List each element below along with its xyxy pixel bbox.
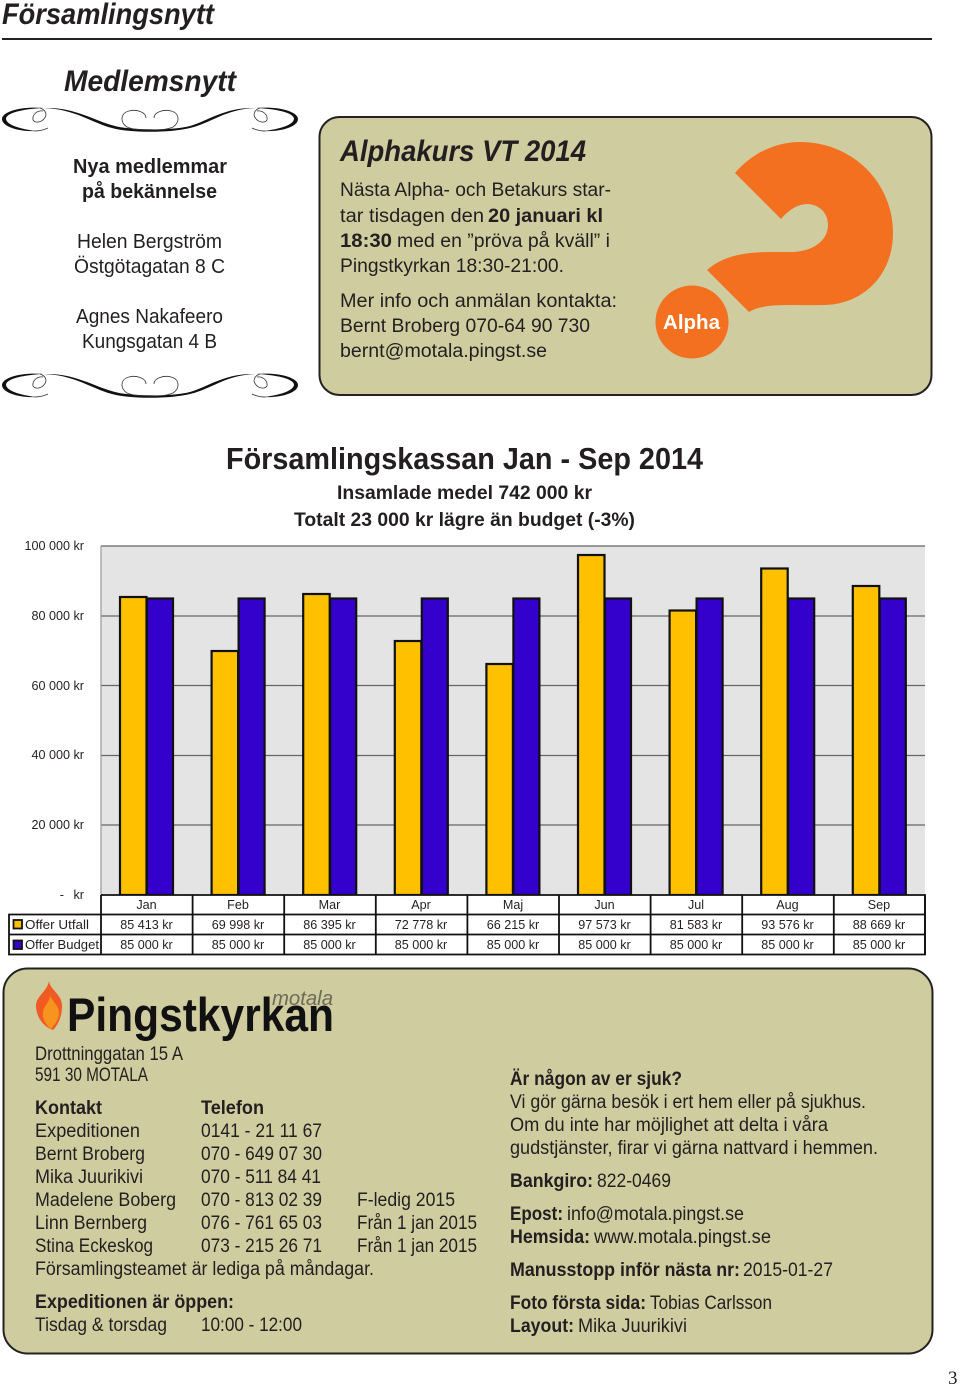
text block: contact list: Från 1 jan 2015 — [357, 1236, 477, 1257]
table: Offer Utfall values: 72 778 kr — [395, 918, 447, 932]
text block: contact list: F-ledig 2015 — [357, 1190, 455, 1211]
heading: chart title: Insamlade medel 742 000 kr — [337, 483, 593, 504]
text block: opening hours — [35, 1292, 302, 1336]
text block: course details: Nästa Alpha- och Betakurs star- — [340, 180, 611, 201]
table: Offer Budget values: 85 000 kr — [487, 938, 539, 952]
axis labels: 20 000 kr — [31, 818, 84, 832]
text block: address: 591 30 MOTALA — [35, 1065, 148, 1086]
text block: practical details: info@motala.pingst.se — [567, 1204, 744, 1225]
text block: contact list: 070 - 649 07 30 — [201, 1144, 322, 1165]
table: months: Apr — [411, 898, 431, 912]
text block: course details: Pingstkyrkan 18:30-21:00. — [340, 256, 564, 277]
text block: contact list: Stina Eckeskog — [35, 1236, 153, 1257]
text block: practical details: 822-0469 — [597, 1171, 671, 1192]
text block: contact list: 073 - 215 26 71 — [201, 1236, 322, 1257]
panel: contact information — [4, 968, 932, 1354]
table: Offer Utfall values: 97 573 kr — [578, 918, 631, 932]
table: Offer Budget values — [120, 938, 905, 952]
axis labels: - — [60, 888, 64, 902]
table: months: Mar — [319, 898, 340, 912]
table: Offer Budget values: 85 000 kr — [303, 938, 356, 952]
text block: course details: med en ”pröva på kväll” i — [397, 231, 610, 252]
table: months: Aug — [776, 898, 799, 912]
logo: Pingstkyrkan motala: Pingstkyrkan — [67, 988, 334, 1041]
legend: Offer Budget: Offer Budget — [25, 937, 99, 952]
table: Offer Utfall values: 85 413 kr — [120, 918, 173, 932]
table: Offer Utfall values — [120, 918, 905, 932]
text block: contact list: Mika Juurikivi — [35, 1167, 143, 1188]
heading: chart title: Totalt 23 000 kr lägre än budget (-3%) — [294, 510, 635, 531]
icon: Alpha question mark: Alpha — [663, 312, 721, 334]
text block: contact list: Telefon — [201, 1098, 264, 1119]
bars: Offer Budget — [147, 598, 906, 895]
text block: practical details: Hemsida: — [510, 1227, 590, 1248]
text block: contact list: Madelene Boberg — [35, 1190, 176, 1211]
logo: Pingstkyrkan motala: motala — [272, 988, 333, 1010]
text block: contact list: 070 - 813 02 39 — [201, 1190, 322, 1211]
text block: opening hours: Expeditionen är öppen: — [35, 1292, 234, 1313]
axis labels: 60 000 kr — [31, 679, 84, 693]
table: Offer Utfall values: 81 583 kr — [670, 918, 722, 932]
text block: contact list: Linn Bernberg — [35, 1213, 147, 1234]
icon: Alpha question mark — [656, 142, 893, 358]
text block: contact list: Expeditionen — [35, 1121, 140, 1142]
table: Offer Budget values: 85 000 kr — [670, 938, 722, 952]
text block: sick visits: Är någon av er sjuk? — [510, 1069, 682, 1090]
table: Offer Budget values: 85 000 kr — [853, 938, 905, 952]
text block: course details: 18:30 — [340, 231, 392, 252]
text block: contact list — [35, 1098, 477, 1280]
axis labels — [24, 539, 84, 902]
heading: chart title — [226, 441, 704, 531]
panel: Alpha course — [320, 117, 932, 395]
text block: sick visits — [510, 1069, 878, 1159]
text block: address — [35, 1044, 183, 1086]
table: Offer Budget values: 85 000 kr — [395, 938, 447, 952]
table: Offer Utfall values: 66 215 kr — [487, 918, 539, 932]
text block: course details: Bernt Broberg 070-64 90 730 — [340, 316, 590, 337]
table: months: Sep — [868, 898, 890, 912]
table: Offer Budget values: 85 000 kr — [578, 938, 631, 952]
table: months — [136, 898, 890, 912]
text block: new members: Nya medlemmar — [73, 156, 227, 178]
table: Offer Budget values: 85 000 kr — [761, 938, 814, 952]
heading: Medlemsnytt: Medlemsnytt — [64, 65, 238, 98]
heading: Alphakurs VT 2014: Alphakurs VT 2014 — [339, 135, 586, 168]
bar chart: offer vs budget — [24, 539, 925, 902]
text block: contact list: Bernt Broberg — [35, 1144, 145, 1165]
text block: contact list: 070 - 511 84 41 — [201, 1167, 321, 1188]
table: months: Jun — [594, 898, 615, 912]
decorative flourish top — [2, 108, 298, 132]
bars: Offer Utfall — [120, 555, 879, 895]
text block: new members: Agnes Nakafeero — [76, 306, 223, 328]
text block: opening hours: 10:00 - 12:00 — [201, 1315, 302, 1336]
text block: practical details: Mika Juurikivi — [578, 1316, 687, 1337]
text block: practical details: Manusstopp inför nästa nr: — [510, 1260, 740, 1281]
axis labels: kr — [74, 888, 84, 902]
text block: practical details: Tobias Carlsson — [650, 1293, 772, 1314]
table: Offer Budget values: 85 000 kr — [212, 938, 264, 952]
axis labels: 40 000 kr — [31, 748, 84, 762]
table: Offer Budget values: 85 000 kr — [120, 938, 173, 952]
text block: address: Drottninggatan 15 A — [35, 1044, 183, 1065]
legend: Offer Utfall: Offer Utfall — [25, 917, 89, 932]
text block: sick visits: Vi gör gärna besök i ert hem eller på sjukhus. — [510, 1092, 866, 1113]
text block: contact list: Kontakt — [35, 1098, 103, 1119]
text block: practical details: Foto första sida: — [510, 1293, 646, 1314]
text block: new members — [73, 156, 227, 353]
table: months: Maj — [503, 898, 523, 912]
text block: new members: Helen Bergström — [77, 231, 222, 253]
text block: new members: Östgötagatan 8 C — [74, 256, 225, 278]
text block: new members: Kungsgatan 4 B — [82, 331, 217, 353]
text block: practical details: Layout: — [510, 1316, 574, 1337]
text block: course details: bernt@motala.pingst.se — [340, 341, 547, 362]
text block: contact list: 076 - 761 65 03 — [201, 1213, 322, 1234]
decorative flourish bottom — [2, 374, 298, 398]
text block: sick visits: Om du inte har möjlighet att delta i våra — [510, 1115, 828, 1136]
axis labels: 100 000 kr — [24, 539, 84, 553]
text block: practical details — [510, 1171, 833, 1337]
table: months: Jul — [688, 898, 704, 912]
text block: course details: 20 januari kl — [488, 206, 603, 227]
text block: practical details: 2015-01-27 — [743, 1260, 833, 1281]
text block: contact list: Församlingsteamet är lediga på måndagar. — [35, 1259, 374, 1280]
table: months: Feb — [227, 898, 249, 912]
table: Offer Utfall values: 69 998 kr — [212, 918, 264, 932]
text block: new members: på bekännelse — [82, 180, 217, 203]
text block: practical details: Bankgiro: — [510, 1171, 593, 1192]
text block: contact list: 0141 - 21 11 67 — [201, 1121, 322, 1142]
text block: practical details: Epost: — [510, 1204, 563, 1225]
text block: contact list: Från 1 jan 2015 — [357, 1213, 477, 1234]
text block: practical details: www.motala.pingst.se — [593, 1227, 771, 1248]
table: Offer Utfall values: 88 669 kr — [853, 918, 905, 932]
data table — [9, 895, 925, 955]
text block: sick visits: gudstjänster, firar vi gärna nattvard i hemmen. — [510, 1138, 878, 1159]
axis labels: 80 000 kr — [31, 609, 84, 623]
text block: course details — [340, 180, 617, 362]
text block: course details: Mer info och anmälan kontakta: — [340, 291, 617, 312]
text block: opening hours: Tisdag & torsdag — [35, 1315, 167, 1336]
table: Offer Utfall values: 86 395 kr — [303, 918, 356, 932]
table: Offer Utfall values: 93 576 kr — [761, 918, 814, 932]
heading: chart title: Församlingskassan Jan - Sep 2014 — [226, 441, 704, 476]
text block: course details: tar tisdagen den — [340, 206, 484, 227]
table: months: Jan — [136, 898, 157, 912]
